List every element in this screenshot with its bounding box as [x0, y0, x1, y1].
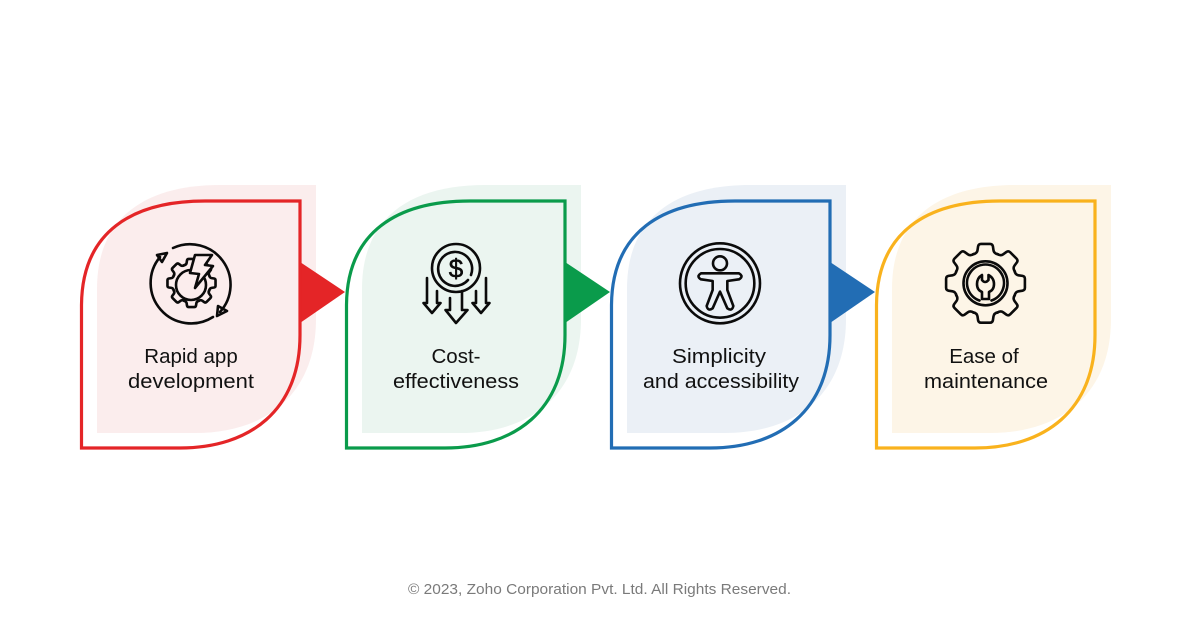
panel: ease of maintenance: maintenance — [924, 370, 1048, 393]
panel: simplicity and accessibility: and accessibility — [643, 370, 800, 393]
icon: dollar coin with down arrows — [424, 244, 490, 323]
card tint — [362, 185, 581, 433]
panel: ease of maintenance — [876, 185, 1111, 448]
card tint — [892, 185, 1111, 433]
icon: gear with wrench — [946, 244, 1025, 323]
card outline — [876, 201, 1095, 448]
icon: gear with lightning and cycle arrows — [151, 244, 231, 323]
panel: rapid app development: development — [128, 370, 254, 393]
arrow: green — [565, 262, 610, 323]
card tint — [97, 185, 316, 433]
footer copyright: © 2023, Zoho Corporation Pvt. Ltd. All Rights Reserved. — [408, 581, 791, 598]
panel: cost-effectiveness: effectiveness — [393, 370, 519, 393]
icon: accessibility figure — [680, 243, 760, 323]
panel: cost-effectiveness — [346, 185, 610, 448]
arrow: red — [300, 262, 345, 323]
arrow: blue — [830, 262, 875, 323]
card outline — [82, 201, 300, 448]
card outline — [346, 201, 565, 448]
label: Simplicity — [672, 345, 767, 368]
card outline — [612, 201, 830, 448]
label: Cost- — [432, 345, 480, 368]
card tint — [627, 185, 846, 433]
label: Ease of — [949, 345, 1019, 368]
label: Rapid app — [144, 345, 238, 368]
panel: rapid app development — [82, 185, 345, 448]
panel: simplicity and accessibility — [612, 185, 875, 448]
icon: dollar coin with down arrows: $ — [449, 254, 464, 284]
